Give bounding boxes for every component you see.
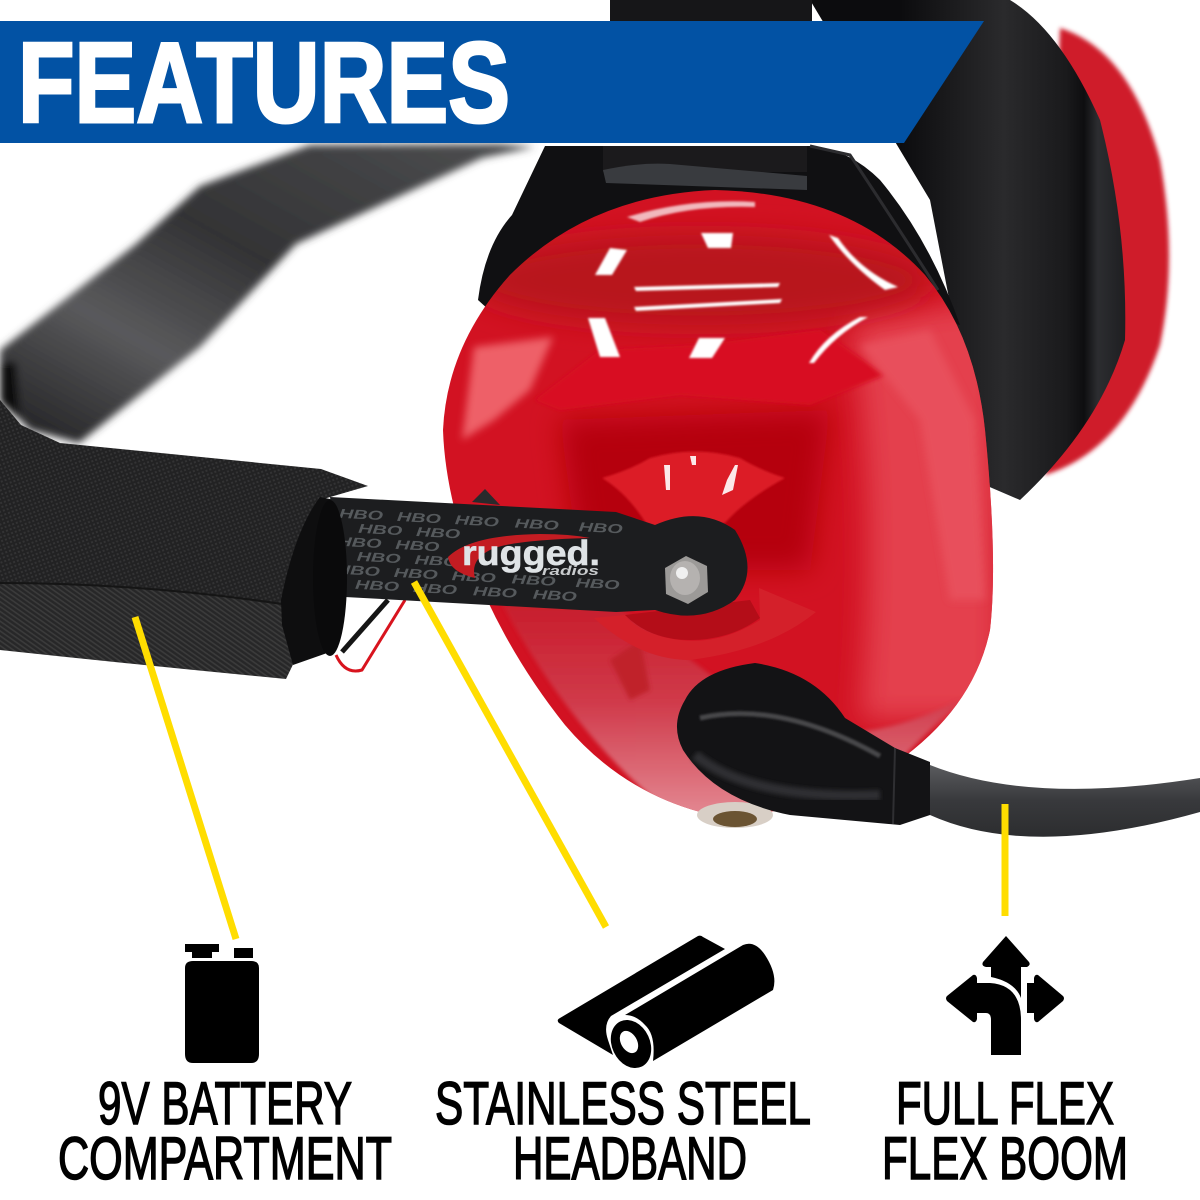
label: headband: HEADBAND: [513, 1125, 747, 1192]
yoke: [478, 146, 960, 325]
far ear cup: [810, 0, 1169, 500]
mic connector: [677, 663, 1200, 837]
repeating HBO print: HBO: [337, 534, 382, 551]
repeating HBO print: HBO: [397, 509, 441, 526]
repeating HBO print: [340, 509, 622, 601]
wires: [336, 600, 405, 671]
dimple above bolt: [602, 452, 785, 530]
label: boom: [882, 1070, 1128, 1192]
label: battery: [58, 1070, 392, 1192]
repeating HBO print: HBO: [356, 549, 401, 566]
repeating HBO print: HBO: [393, 565, 438, 582]
repeating HBO print: HBO: [511, 571, 556, 589]
callout line: battery: [135, 617, 236, 939]
repeating HBO print: HBO: [355, 577, 399, 594]
steel headband arm: [313, 497, 748, 656]
logo: radios: [542, 563, 599, 578]
glossy highlights: [588, 201, 898, 363]
blurred rear headband: [0, 144, 535, 443]
label: headband: STAINLESS STEEL: [435, 1070, 811, 1137]
padded headband: [0, 400, 368, 679]
label: headband: [435, 1070, 811, 1192]
repeating HBO print: HBO: [473, 583, 517, 601]
label: boom: FULL FLEX: [896, 1070, 1114, 1137]
repeating HBO print: HBO: [358, 521, 403, 538]
repeating HBO print: HBO: [395, 537, 440, 554]
repeating HBO print: HBO: [578, 519, 623, 537]
repeating HBO print: HBO: [339, 506, 383, 523]
headset photo: [0, 0, 1200, 837]
repeating HBO print: HBO: [416, 524, 461, 541]
repeating HBO print: HBO: [454, 512, 499, 530]
top strap: [610, 0, 812, 22]
label: battery: 9V BATTERY: [98, 1070, 352, 1137]
repeating HBO print: HBO: [336, 562, 380, 579]
repeating HBO print: HBO: [514, 516, 559, 533]
near red ear cup: [430, 180, 1010, 830]
label: battery: COMPARTMENT: [58, 1125, 392, 1192]
repeating HBO print: HBO: [414, 552, 459, 569]
logo swoosh: [448, 534, 590, 578]
icon: flex arrows: [946, 936, 1064, 1055]
repeating HBO print: HBO: [413, 580, 457, 597]
title: FEATURES: [18, 20, 510, 147]
repeating HBO print: HBO: [451, 568, 496, 586]
repeating HBO print: HBO: [575, 575, 620, 592]
logo: rugged.: [462, 534, 600, 573]
grey hook behind arm: [472, 489, 500, 505]
bolt: [665, 556, 708, 604]
icon: 9V battery: [185, 944, 259, 1063]
plastic cap: [313, 500, 347, 656]
callout line: boom: [1002, 804, 1008, 916]
repeating HBO print: HBO: [532, 587, 577, 604]
icon: steel roll: [558, 936, 774, 1075]
callout line: headband: [414, 582, 606, 927]
header banner: [0, 20, 984, 147]
lower recess: [594, 588, 816, 660]
